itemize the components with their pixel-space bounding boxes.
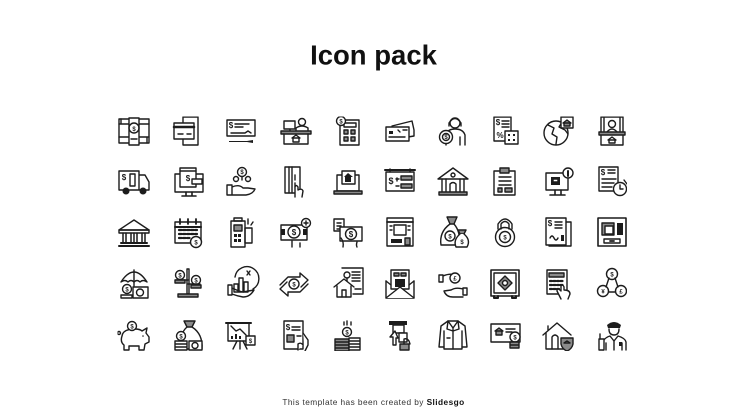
icon: piggy bank: [118, 322, 149, 350]
icon: currency coins cycle: [598, 268, 626, 296]
icon: armored van: [119, 171, 149, 194]
icon: home insurance shield: [543, 323, 573, 351]
icon: umbrella over money: [121, 270, 148, 298]
icon: calculator with coin: $: [339, 120, 343, 126]
icon: hands with banknote and receipt: [334, 219, 362, 247]
icon: hand holding receipt: $: [286, 323, 291, 332]
icon: percent invoice: $: [496, 118, 501, 127]
icon: money bags: $: [448, 234, 452, 240]
icon: bank card board: $: [388, 176, 394, 186]
icon: safe: [491, 270, 519, 298]
icon: bank card board: [385, 169, 415, 191]
icon: envelope with statement: [386, 270, 414, 298]
icon: hand with growth chart: [228, 267, 259, 297]
icon: coin stacks: [335, 321, 360, 351]
icon: money bag and coins: $: [179, 334, 183, 340]
icon: calendar and coin: [175, 219, 202, 248]
icon: banknote bundle: [119, 118, 149, 145]
icon: customer support agent: [440, 118, 465, 145]
icon: laptop with bank: [334, 171, 362, 194]
icon: document with clock: [599, 167, 627, 196]
icon: signed contract: [546, 218, 571, 246]
icon: presentation board: $: [249, 339, 253, 345]
icon: teller window: [599, 117, 625, 145]
icon: currency coins cycle: ¥: [601, 290, 605, 296]
icon: cheque and pen: $: [229, 121, 234, 130]
icon: bank teller desk: [281, 118, 311, 144]
icon: balance scale with coins: $: [178, 274, 182, 280]
icon: currency coins cycle: $: [610, 272, 614, 278]
icon: presentation board: [226, 323, 255, 349]
icon: hand holding coins: [227, 168, 255, 195]
footer credit: This template has been created by Slidesgo: [282, 397, 465, 407]
icon: calculator with coin: [336, 116, 359, 145]
icon: hand giving coin: [439, 273, 467, 297]
icon: money bags: $: [460, 240, 464, 246]
icon: bank building: [119, 220, 149, 246]
icon: hands with banknote and receipt: $: [349, 230, 354, 239]
icon: signed contract: $: [548, 219, 553, 228]
icon: hand holding coins: $: [240, 170, 244, 176]
icon: umbrella over money: $: [125, 288, 129, 294]
icon: calendar and coin: $: [194, 240, 198, 246]
icon: customer support agent: $: [444, 135, 448, 141]
icon: hand giving coin: £: [453, 276, 457, 282]
icon: percent invoice: %: [496, 131, 504, 140]
icon: monitor with lock: [546, 168, 573, 195]
icon: banknote with hand and plus: [281, 218, 310, 247]
icon: currency exchange arrows: [280, 273, 308, 296]
icon: ATM with keypad: [598, 218, 626, 246]
icon: padlock: $: [503, 236, 507, 242]
icon: money bag and coins: [175, 321, 202, 350]
icon: card swipe with finger: [285, 167, 303, 197]
icon: security guard: [599, 322, 626, 350]
icon: bank small house: [438, 168, 468, 195]
icon: bank card with coins: [491, 324, 520, 348]
icon: suit jacket: [439, 321, 467, 349]
icon: coin stacks: $: [345, 330, 349, 336]
icon: balance scale with coins: $: [194, 278, 198, 284]
icon: banknote with hand and plus: $: [292, 228, 297, 237]
icon: banknote bundle: $: [132, 127, 136, 133]
icon: bank card with coins: $: [513, 336, 517, 342]
icon: money bags: [441, 217, 468, 247]
icon: padlock: [496, 219, 514, 246]
icon: house deed document: [334, 268, 363, 297]
icon: ATM machine front: [387, 218, 413, 246]
icon: percent invoice: [494, 117, 518, 144]
icon: armored van: $: [122, 173, 127, 182]
icon: cheque and pen: [227, 120, 255, 143]
icon: card terminal: [231, 218, 253, 247]
icon: hand holding receipt: [284, 321, 308, 351]
icon: clipboard: [494, 168, 515, 195]
icon: monitor online payment: [175, 168, 203, 196]
icon: keypad with finger: [547, 270, 570, 299]
icon: currency exchange arrows: $: [292, 282, 296, 288]
icon: globe with bank bubble: [544, 117, 573, 145]
title: Icon pack: [310, 40, 438, 70]
icon: ATM cash withdrawal: [389, 321, 410, 350]
icon grid: [118, 116, 627, 351]
icon: balance scale with coins: [175, 269, 201, 297]
icon: monitor online payment: $: [186, 174, 191, 183]
icon: card and smartphone: [174, 117, 198, 145]
icon: piggy bank: $: [130, 324, 134, 330]
icon: document with clock: $: [601, 168, 606, 177]
icon: credit cards: [386, 121, 414, 141]
icon: currency coins cycle: £: [619, 290, 623, 296]
